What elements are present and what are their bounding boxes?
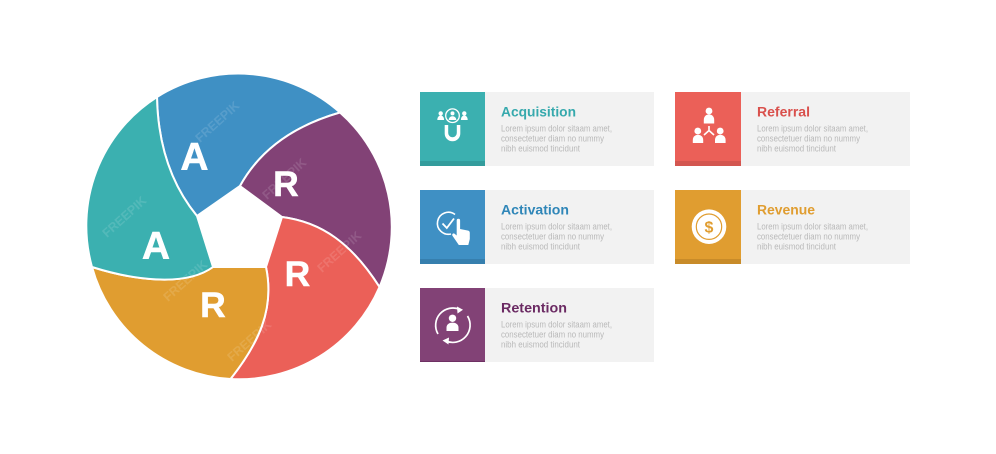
body text: Lorem ipsum dolor sitaam amet,: [757, 222, 868, 232]
body text: [757, 222, 868, 252]
icon tile: [675, 92, 741, 166]
body text: consectetuer diam no nummy: [501, 134, 604, 144]
letter R purple segment: R: [273, 164, 299, 204]
segment: referral red: [230, 217, 380, 379]
panel background: [675, 190, 910, 264]
tile base stripe: [420, 161, 485, 166]
heading: Acquisition: [501, 104, 576, 120]
panel: acquisition: [420, 92, 654, 166]
body text: nibh euismod tincidunt: [757, 144, 836, 154]
icon: people and magnet: [437, 109, 468, 141]
body text: Lorem ipsum dolor sitaam amet,: [501, 124, 612, 134]
segment: activation teal: [86, 97, 213, 280]
icon tile: [675, 190, 741, 264]
letter A blue segment: A: [180, 136, 209, 179]
panel background: [420, 288, 654, 362]
watermark red segment: FREEPIK: [315, 229, 364, 275]
icon: tap check: [437, 212, 470, 245]
watermark orange segment: FREEPIK: [161, 258, 210, 304]
body text: nibh euismod tincidunt: [501, 144, 580, 154]
segment: acquisition blue: [157, 74, 340, 216]
panel background: [420, 190, 654, 264]
letter R red segment: R: [285, 254, 310, 294]
panel: activation: [420, 190, 654, 264]
segment: revenue orange: [92, 267, 268, 379]
body text: consectetuer diam no nummy: [501, 330, 604, 340]
watermark teal segment: FREEPIK: [100, 194, 149, 240]
icon: person in circular arrows: [436, 306, 470, 344]
panel background: [675, 92, 910, 166]
cycle wheel chart: [86, 74, 392, 379]
heading: Revenue: [757, 202, 815, 218]
body text: nibh euismod tincidunt: [501, 242, 580, 252]
icon tile: [420, 288, 485, 362]
body text: [501, 222, 612, 252]
heading: Activation: [501, 202, 569, 218]
body text: consectetuer diam no nummy: [757, 134, 860, 144]
panel background: [420, 92, 654, 166]
tile base stripe: [420, 361, 485, 362]
panel: referral: [675, 92, 910, 166]
icon tile: [420, 190, 485, 264]
panel: revenue: [675, 190, 910, 264]
body text: consectetuer diam no nummy: [501, 232, 604, 242]
panel: retention: [420, 288, 654, 362]
icon: referral network: [693, 108, 726, 143]
watermark lower segment: FREEPIK: [225, 318, 274, 364]
icon: dollar coin: $: [705, 220, 714, 236]
watermark purple segment: FREEPIK: [260, 156, 309, 202]
body text: [501, 124, 612, 154]
heading: Referral: [757, 104, 810, 120]
body text: [501, 320, 612, 350]
body text: Lorem ipsum dolor sitaam amet,: [757, 124, 868, 134]
tile base stripe: [420, 259, 485, 264]
body text: consectetuer diam no nummy: [757, 232, 860, 242]
body text: [757, 124, 868, 154]
body text: Lorem ipsum dolor sitaam amet,: [501, 222, 612, 232]
letter A teal segment: A: [142, 225, 170, 268]
body text: nibh euismod tincidunt: [501, 340, 580, 350]
icon: dollar coin: [692, 209, 726, 244]
letter R orange segment: R: [200, 285, 226, 325]
tile base stripe: [675, 259, 741, 264]
segment: retention purple: [240, 112, 392, 287]
body text: Lorem ipsum dolor sitaam amet,: [501, 320, 612, 330]
tile base stripe: [675, 161, 741, 166]
body text: nibh euismod tincidunt: [757, 242, 836, 252]
heading: Retention: [501, 300, 567, 316]
icon tile: [420, 92, 485, 166]
watermark blue segment: FREEPIK: [193, 99, 242, 145]
